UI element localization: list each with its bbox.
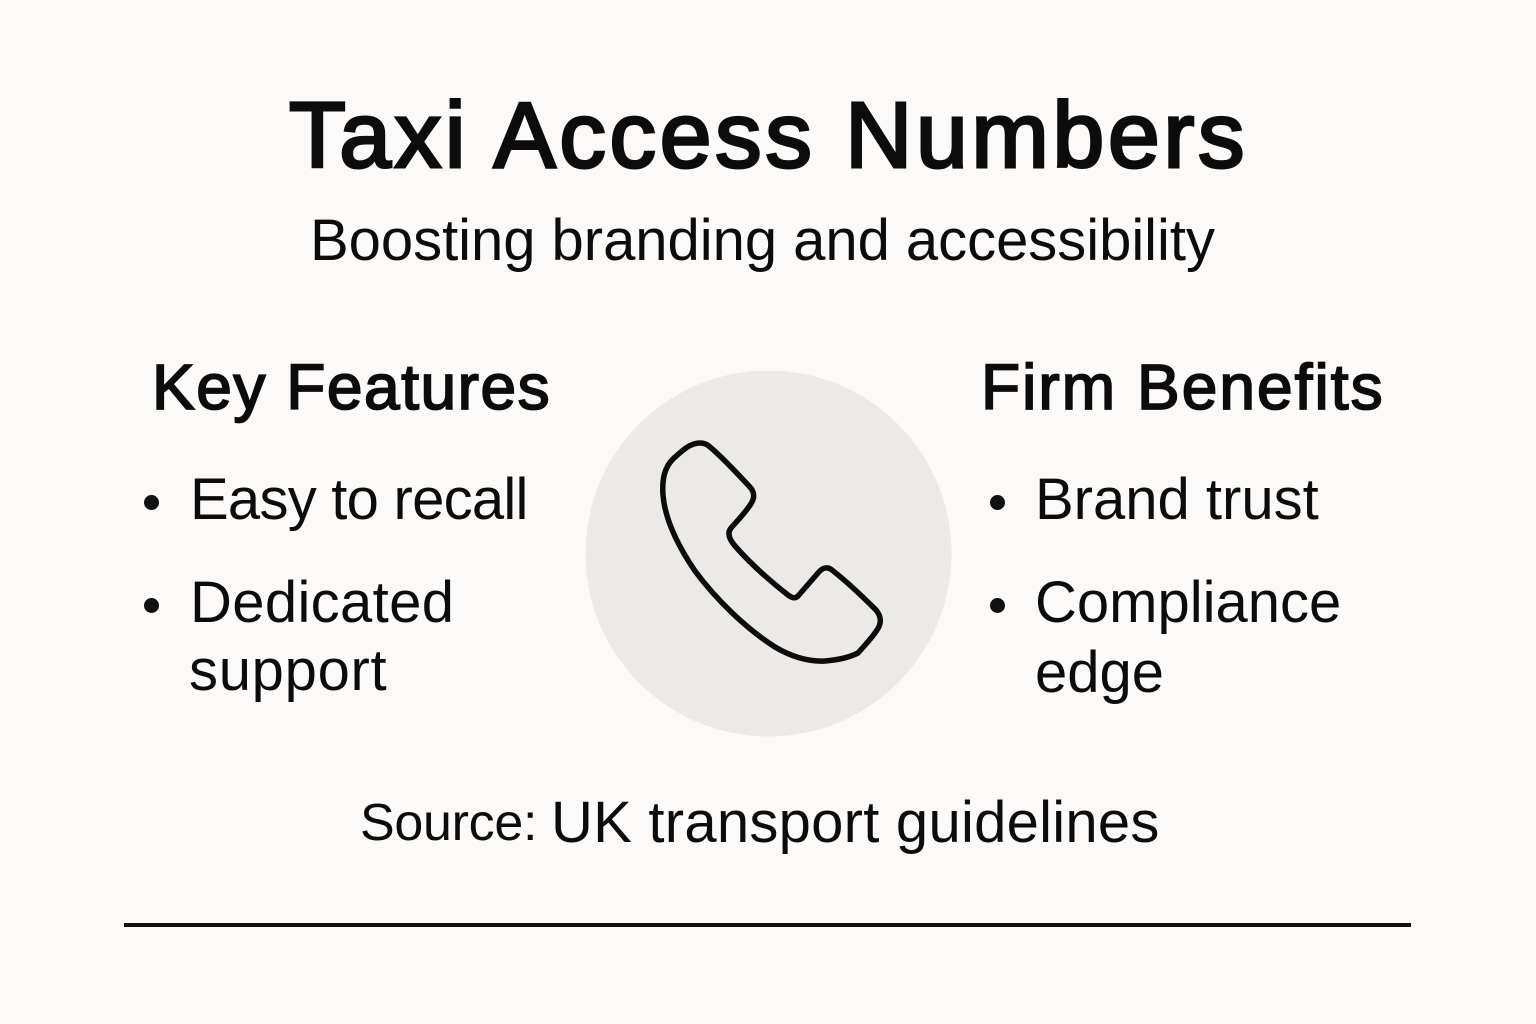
heading: firm benefits: Firm Benefits: [981, 351, 1385, 423]
subtitle: Boosting branding and accessibility: [310, 208, 1215, 273]
heading: key features: Key Features: [152, 351, 551, 423]
panel: key features: [144, 351, 551, 703]
icon: phone handset in circle: [586, 371, 952, 736]
panel: firm benefits: [981, 351, 1385, 705]
list item: compliance edge: Compliance: [1035, 570, 1341, 635]
source note: [360, 790, 1160, 855]
source note: Source:: [360, 794, 537, 852]
list item: easy to recall: Easy to recall: [190, 467, 528, 532]
title: Taxi Access Numbers: [289, 83, 1248, 187]
list item: dedicated support: Dedicated: [190, 570, 454, 635]
list item: dedicated support: support: [189, 638, 387, 703]
list item: compliance edge: edge: [1035, 640, 1164, 705]
text: UK transport guidelines: [551, 790, 1160, 855]
list item: compliance edge: [990, 570, 1341, 705]
list item: brand trust: Brand trust: [1035, 467, 1319, 532]
bottom rule: [124, 923, 1411, 927]
list item: dedicated support: [144, 570, 454, 703]
